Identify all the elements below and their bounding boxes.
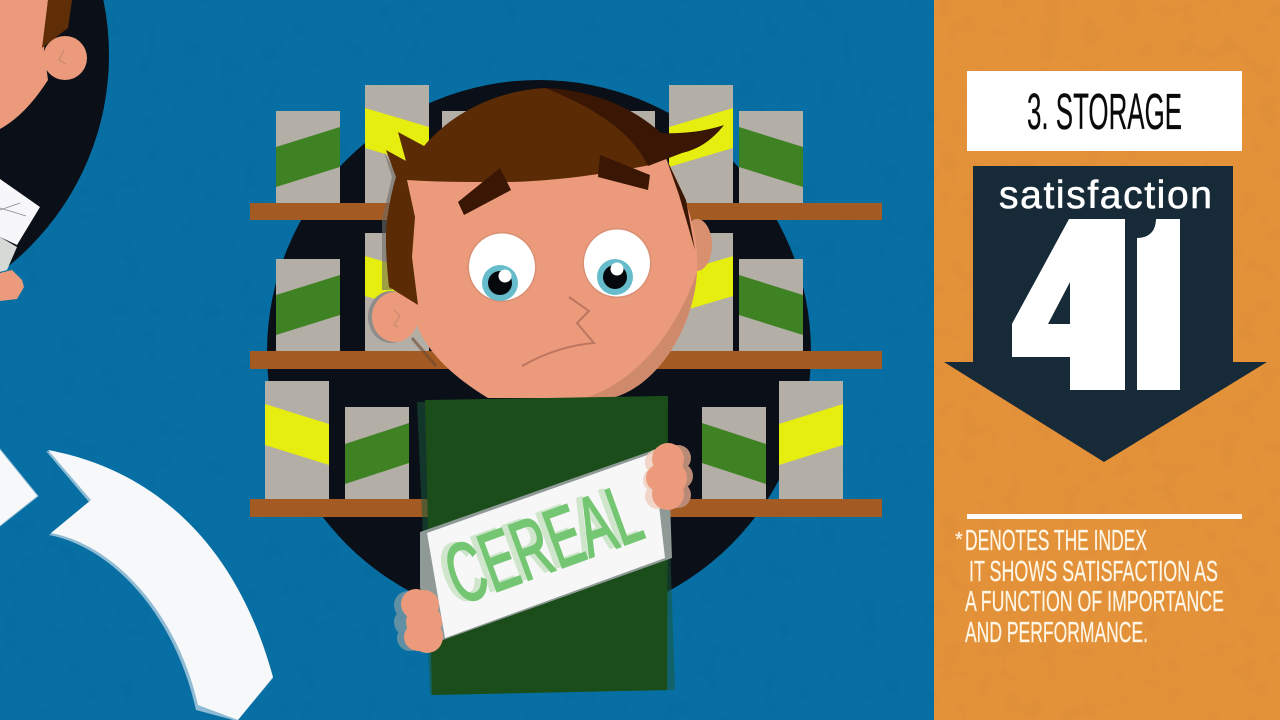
left character face xyxy=(0,0,48,129)
box body xyxy=(425,396,668,695)
panel: storage score xyxy=(934,0,1280,720)
left character hand xyxy=(0,270,24,301)
label back xyxy=(420,445,672,640)
right eyebrow xyxy=(598,155,650,190)
top shelf xyxy=(250,203,882,220)
face xyxy=(404,150,697,398)
bottom shelf xyxy=(250,499,882,517)
cereal wordmark: CEREAL xyxy=(427,466,647,622)
right eye xyxy=(582,228,652,298)
white curved arrow left piece xyxy=(0,443,38,530)
left character hair xyxy=(42,0,72,48)
footnote xyxy=(955,525,1224,649)
left ear shadow xyxy=(368,291,414,343)
left character document xyxy=(0,179,40,272)
score 41 xyxy=(1012,219,1180,390)
cereal wordmark: CEREAL xyxy=(433,465,653,622)
face shading xyxy=(585,272,697,398)
head motion shadow xyxy=(382,152,398,290)
cereal wordmark xyxy=(427,464,653,624)
left ear xyxy=(372,292,418,342)
footnote: * xyxy=(955,529,963,551)
footnote: AND PERFORMANCE. xyxy=(965,617,1148,649)
background: blue xyxy=(0,0,934,720)
right hand xyxy=(643,443,693,510)
left black circle xyxy=(0,0,109,327)
top shelf boxes xyxy=(276,85,803,203)
worried character head xyxy=(368,88,724,398)
label xyxy=(427,453,665,638)
shelves with cereal boxes xyxy=(250,85,882,517)
hair xyxy=(386,88,650,305)
hair dark back lock xyxy=(545,88,724,166)
right ear xyxy=(682,219,712,271)
hair right sideburn xyxy=(666,158,695,250)
central black circle xyxy=(267,80,811,624)
digit 1: 1 xyxy=(1074,168,1234,442)
previous character cropped at left xyxy=(0,0,109,327)
white curved arrow xyxy=(46,450,273,720)
footnote: DENOTES THE INDEX xyxy=(965,525,1147,557)
left character ear xyxy=(43,36,87,80)
nose and mouth xyxy=(522,297,594,366)
jaw shadow xyxy=(412,338,436,366)
heading box xyxy=(967,71,1242,151)
digit 4 counter xyxy=(1048,282,1070,324)
digit 4: 4 xyxy=(1000,168,1136,442)
down arrow with score xyxy=(944,166,1267,462)
orange panel grain xyxy=(934,0,1280,720)
orange panel background xyxy=(934,0,1280,720)
box motion ghost xyxy=(417,396,675,695)
middle shelf xyxy=(250,351,882,369)
divider xyxy=(967,514,1242,519)
left eye xyxy=(468,232,536,302)
cereal box held by the character xyxy=(394,396,693,695)
middle shelf boxes xyxy=(276,233,803,351)
bottom shelf boxes xyxy=(265,381,843,499)
left hand xyxy=(394,589,443,653)
background grain xyxy=(0,0,934,720)
left eyebrow xyxy=(458,168,511,215)
satisfaction label: satisfaction xyxy=(999,174,1212,217)
